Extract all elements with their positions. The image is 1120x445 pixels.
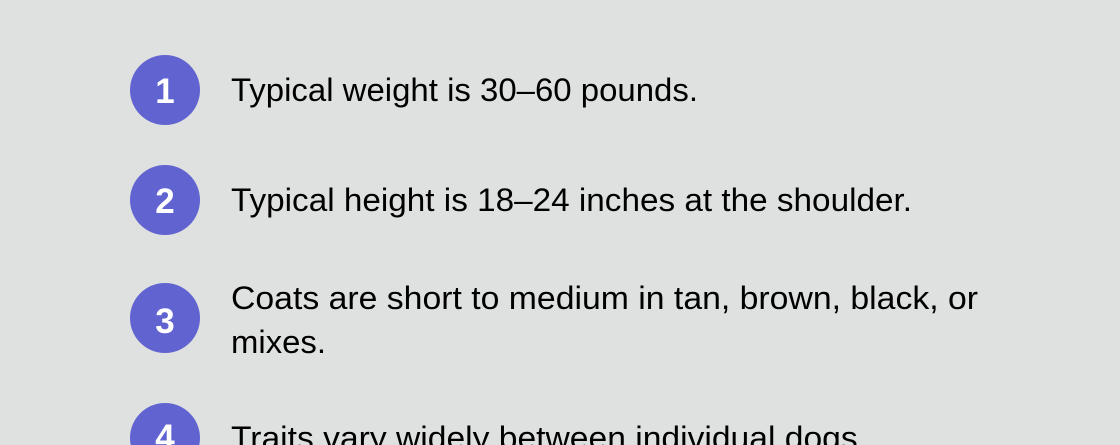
text: weight: Typical weight is 30–60 pounds. <box>231 72 698 108</box>
number badge 3 <box>130 283 200 353</box>
list item 2: height <box>130 165 912 235</box>
text: coats <box>231 280 978 360</box>
number badge 1: 1 <box>155 72 175 111</box>
list item 1: weight <box>130 55 698 125</box>
number badge 3: 3 <box>155 302 175 341</box>
number badge 4 <box>130 403 200 445</box>
number badge 2: 2 <box>155 182 175 221</box>
number badge 1 <box>130 55 200 125</box>
text: coats: mixes. <box>231 324 326 360</box>
text: coats: Coats are short to medium in tan, brown, black, or <box>231 280 978 316</box>
list item 3: coats <box>130 280 978 360</box>
list item 4: variation <box>130 403 867 445</box>
number badge 2 <box>130 165 200 235</box>
text: height: Typical height is 18–24 inches at the shoulder. <box>231 182 912 218</box>
